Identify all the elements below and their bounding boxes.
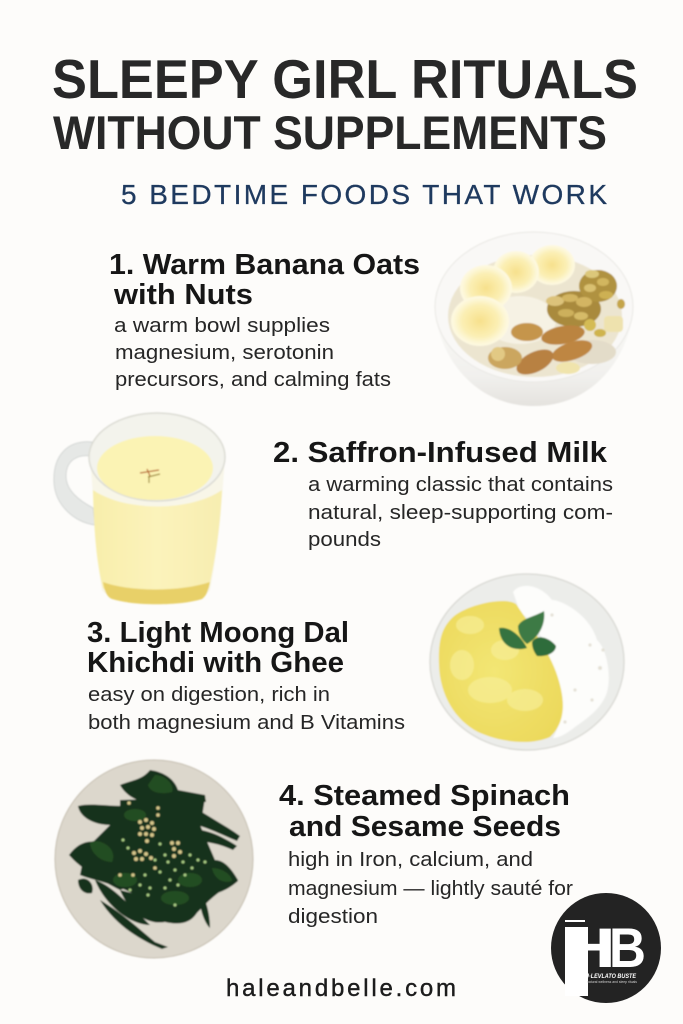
description: item 1: precursors, and calming fats <box>115 369 391 391</box>
heading: item 4: and Sesame Seeds <box>289 811 561 843</box>
description: item 4: digestion <box>288 906 378 928</box>
heading: item 3 <box>87 617 349 679</box>
subtitle: 5 BEDTIME FOODS THAT WORK <box>121 179 607 210</box>
description: item 2: pounds <box>308 529 381 551</box>
herb garnish <box>499 611 556 656</box>
logo: HB badge: natural wellness and sleep rituals <box>587 980 637 984</box>
panel: item 2 saffron milk text <box>273 437 613 551</box>
heading: item 1: with Nuts <box>113 279 253 311</box>
heading: item 1 <box>109 249 420 311</box>
dal <box>439 601 563 742</box>
logo: HB badge: U·LEVLATO BUSTE <box>585 973 637 980</box>
title: SLEEPY GIRL RITUALS <box>52 48 638 110</box>
title: WITHOUT SUPPLEMENTS <box>53 106 607 159</box>
logo: HB badge: H <box>560 916 616 979</box>
description: item 3 <box>88 684 405 734</box>
nuts <box>488 270 625 380</box>
description: item 3: both magnesium and B Vitamins <box>88 712 405 734</box>
icon: mug of saffron milk <box>54 413 225 604</box>
mug handle <box>54 442 95 525</box>
heading: item 3: 3. Light Moong Dal <box>87 617 349 649</box>
logo: HB badge <box>551 893 661 1003</box>
sesame seeds <box>118 801 182 877</box>
spinach leaves <box>69 770 240 949</box>
saffron threads <box>140 469 160 483</box>
icon: bowl of banana oats <box>435 232 633 406</box>
description: item 1: a warm bowl supplies <box>114 315 330 337</box>
panel: item 1 banana oats text <box>109 249 420 391</box>
heading: item 2: 2. Saffron-Infused Milk <box>273 437 608 469</box>
icon: bowl of moong dal khichdi <box>430 574 624 750</box>
heading: item 4 <box>279 780 570 843</box>
banana slices <box>451 245 575 346</box>
description: item 3: easy on digestion, rich in <box>88 684 330 706</box>
rice <box>513 586 609 738</box>
heading: item 3: Khichdi with Ghee <box>87 647 344 679</box>
panel: item 4 spinach text <box>279 780 573 928</box>
description: item 4: magnesium — lightly sauté for <box>288 878 573 900</box>
description: item 2 <box>308 474 613 551</box>
title <box>52 48 638 159</box>
description: item 4: high in Iron, calcium, and <box>288 849 533 871</box>
description: item 1: magnesium, serotonin <box>115 342 334 364</box>
panel: item 3 khichdi text <box>87 617 405 734</box>
description: item 2: natural, sleep-supporting com- <box>308 502 613 524</box>
footer: website: haleandbelle.com <box>226 975 456 1002</box>
description: item 1 <box>114 315 391 391</box>
description: item 2: a warming classic that contains <box>308 474 613 496</box>
heading: item 1: 1. Warm Banana Oats <box>109 249 420 281</box>
icon: plate of spinach and sesame <box>55 760 253 958</box>
logo: HB badge: B <box>609 916 646 979</box>
description: item 4 <box>288 849 573 928</box>
heading: item 4: 4. Steamed Spinach <box>279 780 570 812</box>
